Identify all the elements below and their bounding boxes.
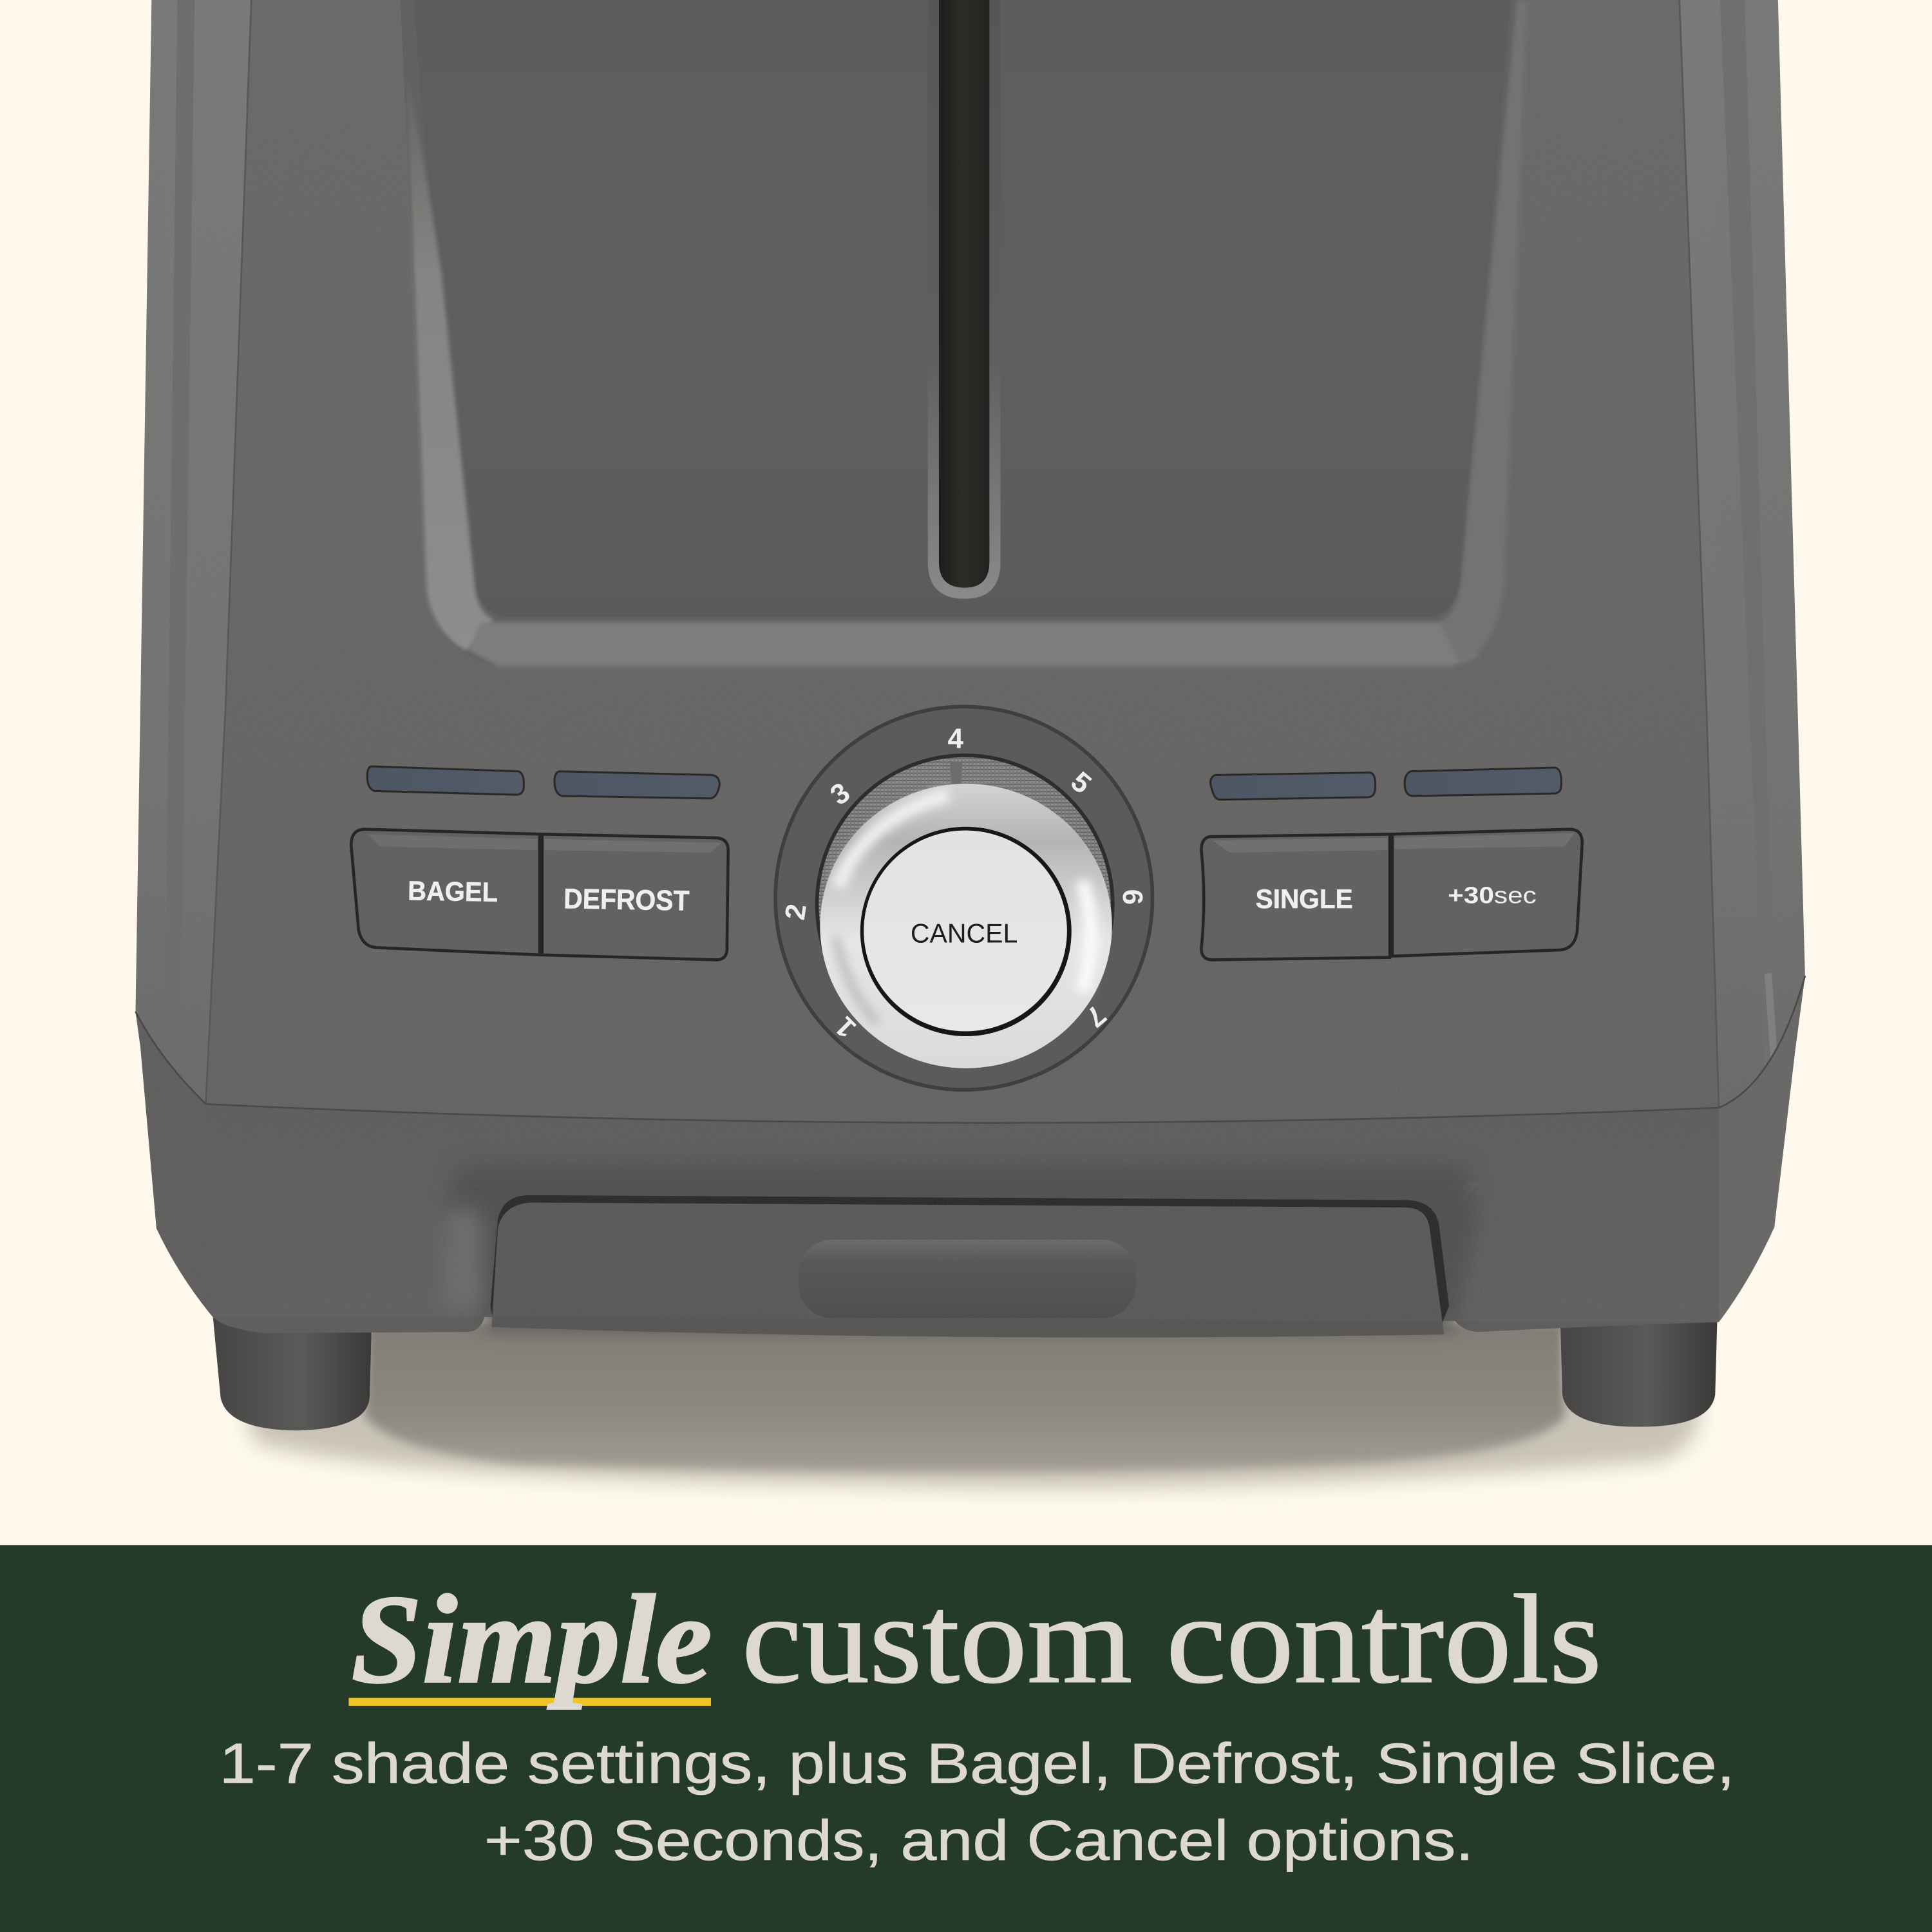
right foot [1560,1306,1718,1427]
button: single [1201,834,1390,960]
shade numbers: 5 [1065,766,1097,800]
crumb tray [491,1202,1444,1338]
body grain [137,0,1804,1321]
bread slot [928,0,1001,599]
front edge lines [206,0,1719,1108]
recess flat area [414,0,1511,618]
base crease line [135,976,1805,1123]
heading: custom controls [742,1569,1602,1710]
heading: Simple [351,1569,712,1710]
button: defrost [542,834,728,960]
cancel button edge [860,827,1072,1036]
bagel light [367,766,524,795]
toaster body [135,0,1806,1338]
shade numbers: 1 [829,1010,862,1044]
cancel button face [864,831,1067,1031]
description line 2: +30 Seconds, and Cancel options. [484,1808,1473,1872]
body side silhouette [135,0,1805,1322]
right side streak [1765,973,1777,1059]
lower side panels [135,1012,212,1316]
recess highlight left [444,1207,483,1310]
crumb tray recess [444,1164,1479,1328]
bottom bevel highlight [468,622,1479,667]
button: single: SINGLE [1256,884,1353,914]
shadow under toaster [247,1321,1700,1488]
+30 sec light [1405,768,1561,796]
recess outer shape [401,0,1528,667]
crumb tray handle [799,1240,1136,1318]
dial pointer [950,761,962,793]
button: bagel [351,829,540,955]
front face [206,0,1719,1123]
dial outer ring [775,706,1152,1090]
cancel label: CANCEL [911,918,1018,949]
single light [1211,773,1376,800]
knurled collar [817,755,1113,1054]
silver knob [820,784,1112,1068]
toaster feet [212,1306,1718,1430]
button: defrost: DEFROST [564,883,690,917]
indicator lights [367,766,1561,800]
shade numbers: 4 [947,723,963,754]
button: bagel: BAGEL [408,875,498,907]
button: +30 sec [1392,829,1582,956]
side fold shading [164,0,194,1090]
description line 1: 1-7 shade settings, plus Bagel, Defrost, Single Slice, [220,1731,1735,1795]
crumb tray gap [490,1195,1449,1325]
shade numbers: 2 [779,902,813,922]
left bevel highlight [405,62,493,650]
defrost light [554,772,719,799]
shade numbers: 6 [1117,889,1148,905]
shade numbers: 7 [1079,999,1112,1033]
button: +30 sec: +30 sec [1448,882,1537,908]
core shadow [365,1321,1565,1472]
caption band [0,1545,1932,1932]
lever recess panel [401,0,1528,667]
control buttons [351,829,1582,960]
knob highlights [835,795,1091,1023]
lower base [206,1104,1719,1333]
shade dial [775,706,1152,1090]
shade numbers: 3 [824,777,856,811]
shade numbers [779,723,1148,1044]
soft outer shadow [247,1392,1700,1488]
right bevel [1439,0,1528,663]
heading underline [348,1698,711,1706]
left foot [212,1306,372,1430]
